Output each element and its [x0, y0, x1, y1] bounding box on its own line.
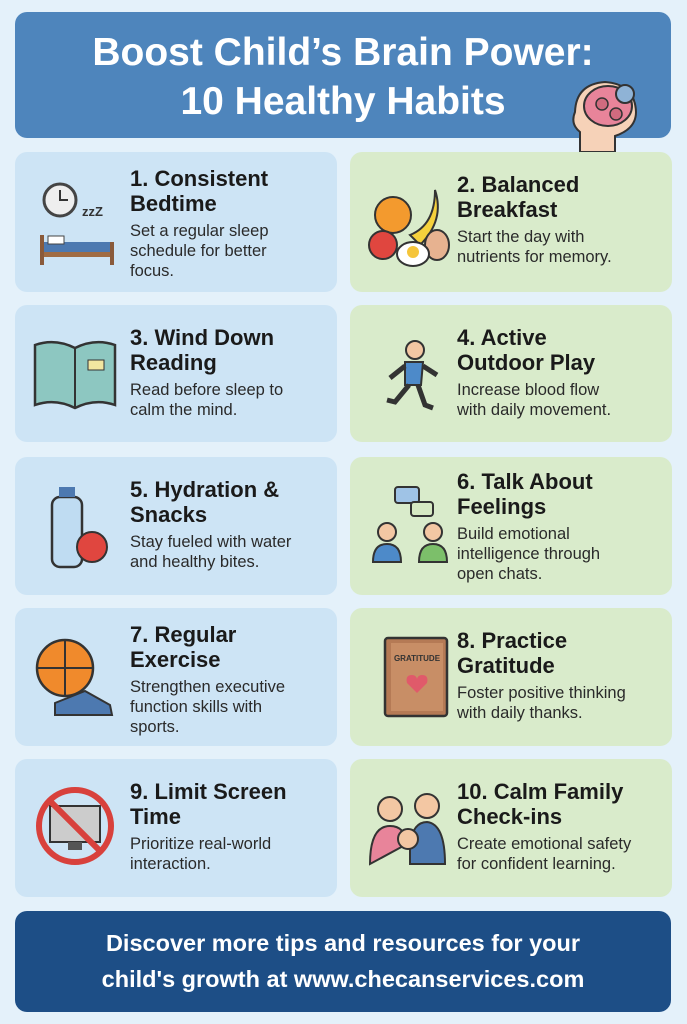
icon: talking people — [372, 486, 448, 563]
card 3: Read before sleep to — [130, 381, 283, 399]
icon: bed clock: zzZ — [82, 204, 103, 219]
card 7: sports. — [130, 718, 180, 736]
card 1: schedule for better — [130, 242, 267, 260]
card 5: Snacks — [130, 502, 207, 527]
card 8: 8. Practice — [457, 628, 567, 653]
card 7: function skills with — [130, 698, 262, 716]
card 3: 3. Wind Down — [130, 325, 274, 350]
title: 10 Healthy Habits — [180, 80, 506, 123]
card 8: Gratitude — [457, 653, 555, 678]
card 5 — [15, 457, 337, 595]
footer: child's growth at www.checanservices.com — [102, 966, 584, 992]
card 7: Exercise — [130, 647, 221, 672]
icon: bed clock — [40, 182, 114, 265]
title: Boost Child’s Brain Power: — [92, 31, 594, 74]
card 9: Time — [130, 804, 181, 829]
icon: gratitude book — [384, 636, 448, 718]
card 1: focus. — [130, 262, 174, 280]
card 7 — [15, 608, 337, 746]
card 10: Create emotional safety — [457, 835, 631, 853]
footer: Discover more tips and resources for your — [106, 930, 580, 956]
card 5: 5. Hydration & — [130, 477, 279, 502]
card 9: 9. Limit Screen — [130, 779, 287, 804]
card 10: Check-ins — [457, 804, 562, 829]
icon: family — [369, 793, 446, 866]
icon: no screen — [36, 787, 114, 865]
card 7: Strengthen executive — [130, 678, 285, 696]
card 4 — [350, 305, 672, 442]
icon: breakfast — [368, 190, 450, 267]
card 4: with daily movement. — [457, 401, 611, 419]
icon: gratitude book: GRATITUDE — [394, 654, 441, 663]
card 8: with daily thanks. — [457, 704, 583, 722]
footer — [15, 911, 671, 1012]
icon: running child — [386, 340, 438, 410]
card 9: interaction. — [130, 855, 211, 873]
icon: child brain — [572, 81, 637, 152]
card 10 — [350, 759, 672, 897]
icon: book — [34, 340, 116, 410]
card 2 — [350, 152, 672, 292]
card 2: Breakfast — [457, 197, 557, 222]
card 4: Increase blood flow — [457, 381, 599, 399]
card 9 — [15, 759, 337, 897]
card 2: Start the day with — [457, 228, 584, 246]
card 6: 6. Talk About — [457, 469, 593, 494]
card 10: for confident learning. — [457, 855, 616, 873]
card 8: Foster positive thinking — [457, 684, 626, 702]
card 5: Stay fueled with water — [130, 533, 291, 551]
card 7: 7. Regular — [130, 622, 236, 647]
icon: basketball shoe — [36, 638, 114, 716]
card 4: 4. Active — [457, 325, 547, 350]
card 6: Build emotional — [457, 525, 570, 543]
card 10: 10. Calm Family — [457, 779, 623, 804]
card 8 — [350, 608, 672, 746]
card 2: 2. Balanced — [457, 172, 579, 197]
card 6: open chats. — [457, 565, 542, 583]
card 5: and healthy bites. — [130, 553, 259, 571]
card 1: Set a regular sleep — [130, 222, 269, 240]
card 1: Bedtime — [130, 191, 217, 216]
card 6 — [350, 457, 672, 595]
card 2: nutrients for memory. — [457, 248, 612, 266]
card 1: 1. Consistent — [130, 166, 268, 191]
card 3 — [15, 305, 337, 442]
card 9: Prioritize real-world — [130, 835, 271, 853]
card 6: Feelings — [457, 494, 546, 519]
card 6: intelligence through — [457, 545, 600, 563]
card 1 — [15, 152, 337, 292]
icon: water apple — [50, 487, 108, 568]
card 4: Outdoor Play — [457, 350, 595, 375]
card 3: calm the mind. — [130, 401, 237, 419]
title — [15, 12, 671, 138]
card 3: Reading — [130, 350, 217, 375]
